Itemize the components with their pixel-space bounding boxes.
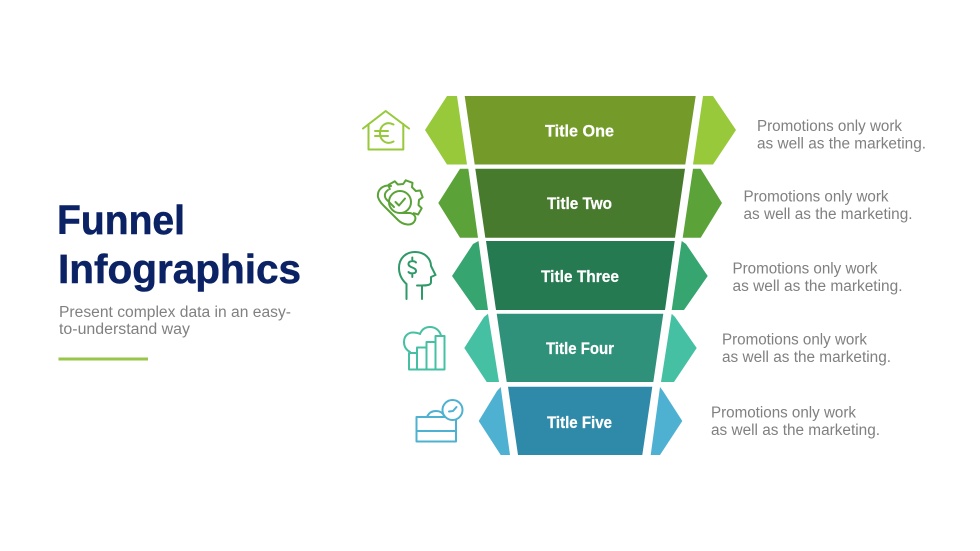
title: Funnel (57, 197, 185, 243)
funnel row 4 (404, 314, 891, 382)
label 2: Title Two (547, 194, 612, 213)
funnel row 2 (378, 169, 912, 238)
description 2: as well as the marketing. (744, 206, 912, 223)
icon: gear with hand and check (378, 180, 423, 224)
description 3 (732, 260, 902, 295)
label 5: Title Five (547, 413, 612, 432)
description 3: Promotions only work (732, 260, 878, 278)
description 5: as well as the marketing. (711, 422, 880, 439)
subtitle: Present complex data in an easy- (59, 304, 291, 321)
description 4: Promotions only work (722, 332, 867, 348)
subtitle (59, 304, 291, 338)
icon: head with dollar (399, 252, 436, 299)
funnel row 5 (416, 387, 880, 455)
icon: cloud and bar chart (404, 327, 444, 370)
right wing 3 (672, 241, 708, 310)
title (57, 197, 301, 292)
label 1: Title One (545, 122, 614, 140)
center trapezoid 3 (486, 241, 675, 310)
center trapezoid 5 (508, 387, 652, 455)
left wing 2 (438, 169, 478, 238)
right wing 5 (651, 387, 682, 455)
left wing 5 (479, 387, 510, 455)
description 4 (722, 332, 891, 366)
center trapezoid 1 (465, 96, 696, 164)
label 4: Title Four (546, 339, 614, 358)
accent line (58, 358, 148, 360)
description 2 (744, 188, 912, 223)
funnel row 3 (399, 241, 902, 310)
description 1 (757, 118, 926, 152)
description 1: Promotions only work (757, 118, 902, 135)
center trapezoid 4 (497, 314, 663, 382)
description 3: as well as the marketing. (732, 278, 902, 295)
description 2: Promotions only work (744, 188, 889, 206)
right wing 1 (693, 96, 736, 164)
title: Infographics (58, 246, 301, 292)
description 5: Promotions only work (711, 404, 856, 422)
left wing 1 (425, 96, 467, 164)
left heading block (57, 197, 301, 360)
label 3: Title Three (541, 267, 619, 286)
description 1: as well as the marketing. (757, 136, 926, 152)
icon: case with clock (416, 400, 462, 442)
description 5 (711, 404, 880, 439)
funnel row 1 (363, 96, 926, 164)
icon: house with euro (363, 111, 409, 150)
right wing 4 (661, 314, 697, 382)
center trapezoid 2 (475, 169, 685, 238)
left wing 4 (464, 314, 499, 382)
right wing 2 (683, 169, 722, 238)
left wing 3 (452, 241, 488, 310)
subtitle: to-understand way (59, 321, 190, 338)
description 4: as well as the marketing. (722, 349, 891, 366)
